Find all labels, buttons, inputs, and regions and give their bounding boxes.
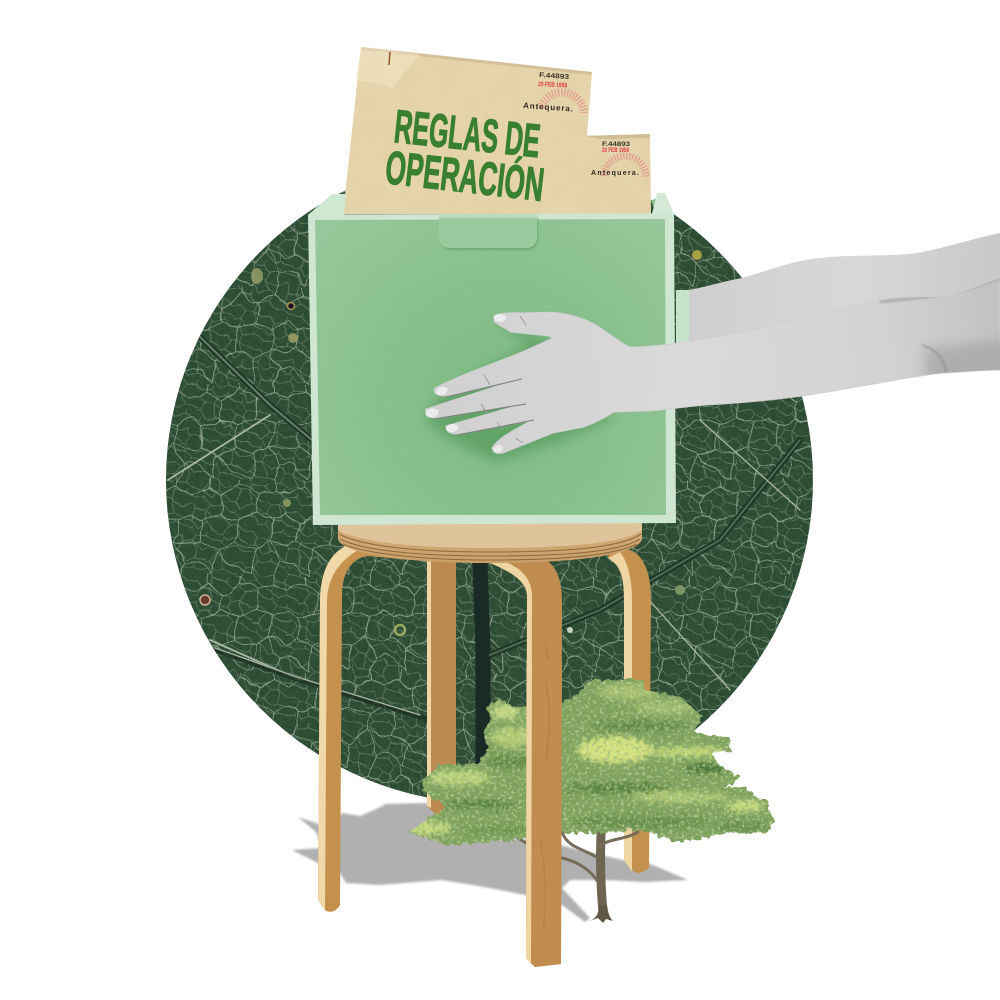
front envelope (343, 47, 592, 214)
box front face (315, 219, 666, 515)
front arm and hand (425, 276, 1000, 454)
front leg over tree (526, 660, 562, 967)
leaf main veins (168, 332, 800, 770)
tree (400, 660, 780, 967)
left leg (318, 544, 410, 912)
stamp marks back: F.44893 (602, 141, 630, 148)
title (383, 99, 547, 211)
front leg (490, 560, 562, 967)
hand shadow on box (425, 320, 610, 462)
box inner flaps (308, 193, 674, 215)
arm shading (879, 278, 1000, 375)
stamp marks back: 20 FEB 1958 (602, 148, 630, 154)
side tab (676, 290, 689, 344)
title: OPERACIÓN (383, 140, 547, 211)
foliage shading (408, 684, 768, 835)
arms (425, 233, 1000, 462)
box front rim (308, 214, 676, 525)
seat (338, 522, 642, 563)
finger lines (434, 316, 534, 443)
foliage (409, 680, 774, 845)
box handle (439, 214, 538, 250)
stamp marks front: F.44893 (539, 72, 569, 81)
leaf circle background (166, 190, 813, 798)
back centre leg (427, 558, 456, 816)
envelopes (343, 47, 651, 214)
stamp marks back (591, 141, 646, 178)
right leg (608, 548, 651, 873)
ground shadow (292, 803, 688, 922)
stamp marks back: Antequera. (591, 170, 639, 177)
trunk and branches (518, 832, 638, 923)
rear arm (689, 233, 1000, 345)
green box (308, 193, 689, 525)
illustration: collage of ballot box on a stool (166, 47, 1000, 967)
title: REGLAS DE (392, 99, 543, 167)
leaf spots (200, 250, 702, 635)
back envelope (570, 134, 651, 214)
foliage mottling (410, 680, 774, 845)
stamp marks front (523, 72, 584, 113)
stool (318, 522, 651, 967)
stamp marks front: Antequera. (523, 101, 573, 113)
stamp marks front: 20 FEB 1958 (538, 81, 568, 90)
fingernails (425, 314, 506, 454)
